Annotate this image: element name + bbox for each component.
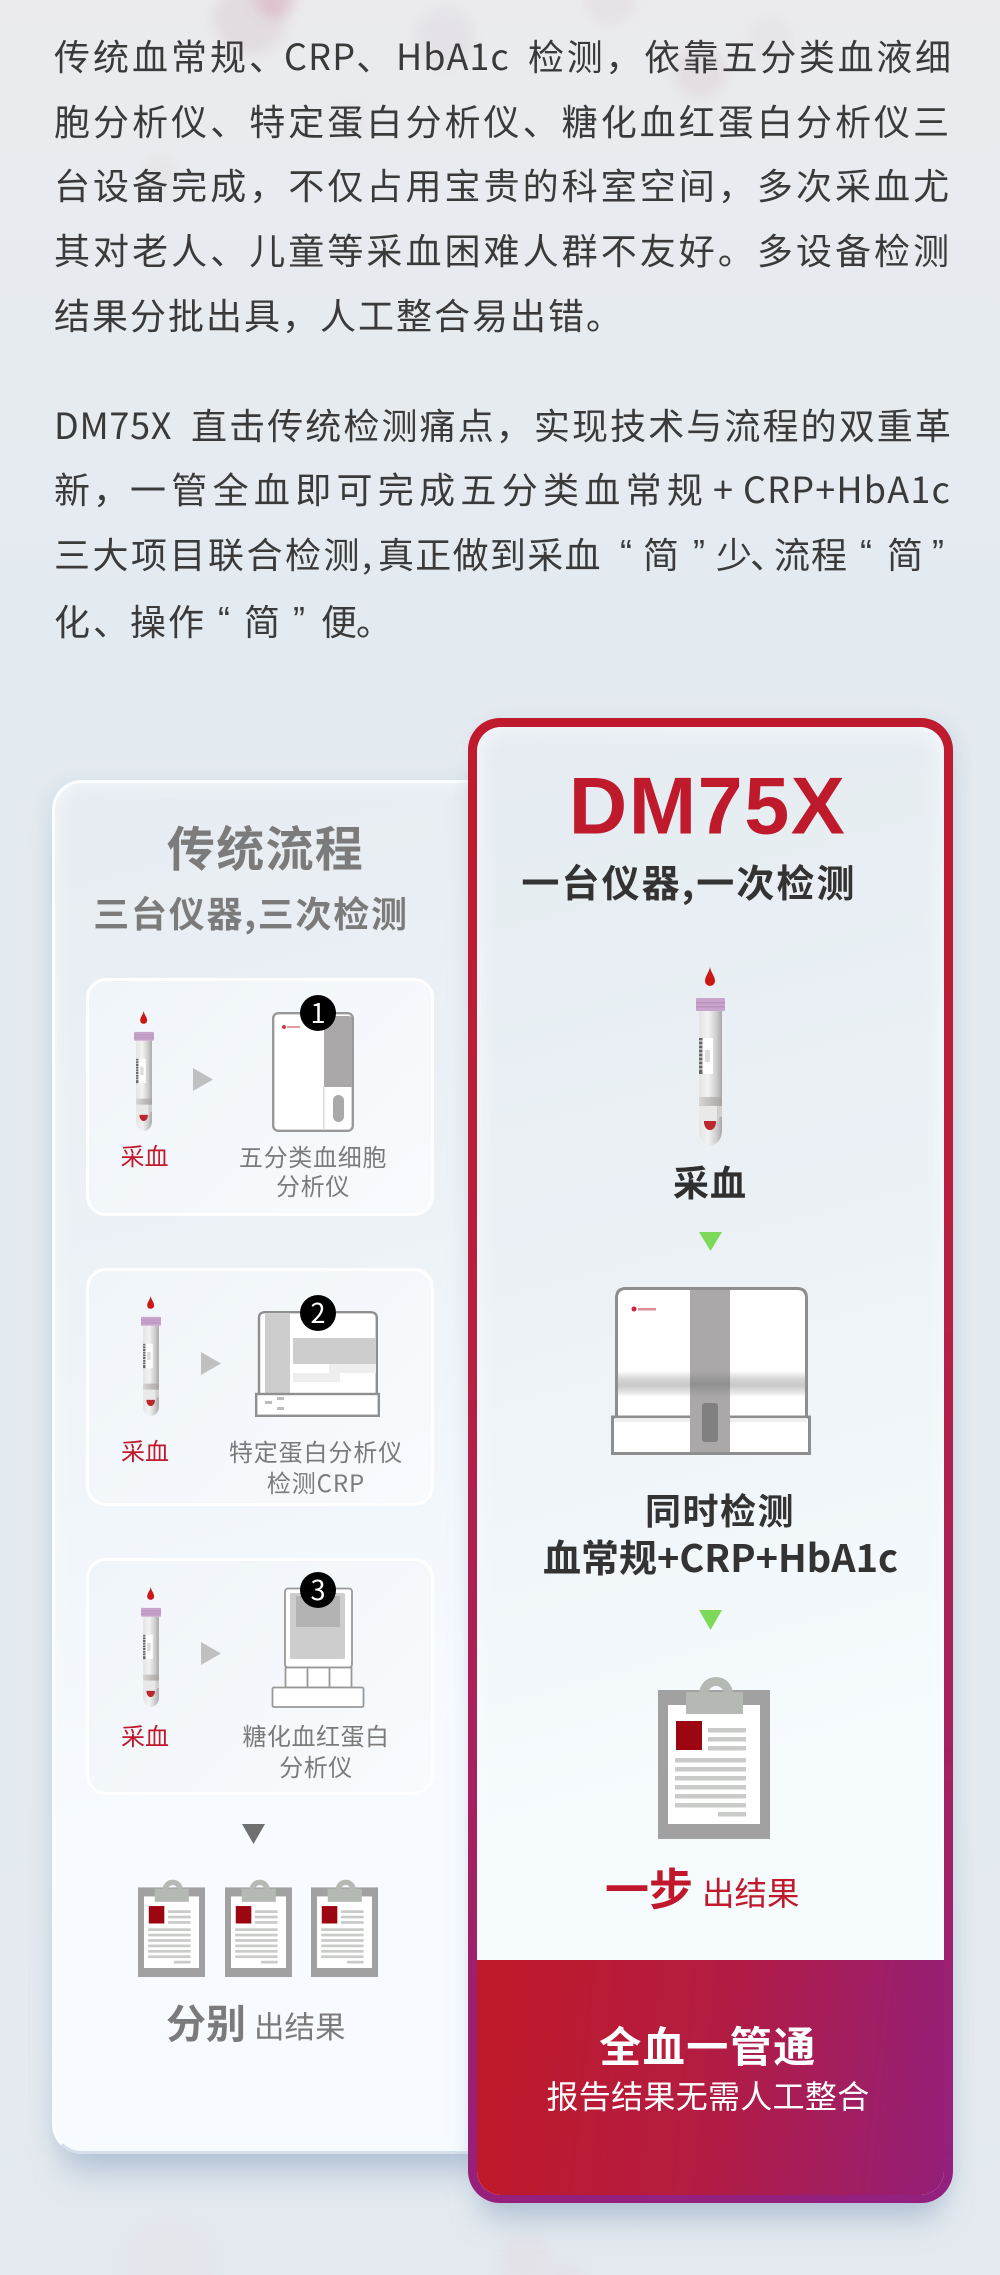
icon: blood tube 2 bbox=[141, 1296, 161, 1416]
label: five-part analyzer: 五分类血细胞 bbox=[239, 1138, 387, 1173]
subheading: three instruments three tests: 三台仪器,三次检测 bbox=[93, 886, 409, 938]
band text: no manual integration: 报告结果无需人工整合 bbox=[546, 2072, 870, 2118]
label: HbA1c analyzer bbox=[242, 1716, 390, 1782]
label: blood draw 1: 采血 bbox=[120, 1137, 168, 1172]
label: blood draw: 采血 bbox=[673, 1155, 747, 1207]
icon: blood tube large bbox=[696, 967, 725, 1145]
step card 2 bbox=[86, 1268, 434, 1506]
badge 1: 1 bbox=[310, 992, 326, 1031]
intro paragraph 2: ” bbox=[932, 532, 944, 573]
intro paragraph 1: HbA1c bbox=[396, 29, 510, 81]
badge 2 bbox=[300, 1295, 336, 1331]
arrow 3 bbox=[201, 1642, 221, 1665]
bottom band bbox=[477, 1960, 944, 2195]
step card 1 bbox=[86, 978, 434, 1216]
badge 3 bbox=[300, 1572, 336, 1608]
icon: specific protein analyzer bbox=[255, 1311, 380, 1417]
label: test items: 血常规+CRP+HbA1c bbox=[543, 1528, 898, 1583]
icon: HbA1c analyzer bbox=[272, 1588, 364, 1708]
label: specific protein analyzer: 特定蛋白分析仪 bbox=[229, 1433, 403, 1468]
intro paragraph 2: “ bbox=[620, 532, 632, 573]
intro paragraph 2: 简 bbox=[887, 527, 923, 579]
panel: traditional process bbox=[52, 780, 552, 2154]
label: blood draw 3: 采血 bbox=[121, 1717, 169, 1752]
intro paragraph 2: , bbox=[362, 527, 372, 579]
intro paragraph 2: 少、 bbox=[716, 527, 784, 579]
arrow 2 bbox=[201, 1352, 221, 1375]
intro paragraph 2: 流程 bbox=[774, 527, 848, 579]
intro paragraph 2: 直击传统检测痛点，实现技术与流程的双重革 bbox=[191, 398, 953, 450]
icon: DM75X analyzer bbox=[611, 1287, 811, 1455]
intro paragraph 2 bbox=[54, 398, 953, 646]
band text: whole blood one tube: 全血一管通 bbox=[599, 2014, 817, 2075]
icon: report 3 bbox=[311, 1880, 378, 1977]
panel: DM75X bbox=[468, 718, 953, 2203]
badge 2: 2 bbox=[310, 1292, 326, 1331]
intro paragraph 1: 其对老人、儿童等采血困难人群不友好。多设备检测 bbox=[54, 223, 952, 275]
intro paragraph 2: 简 bbox=[643, 527, 679, 579]
heading: traditional process: 传统流程 bbox=[167, 810, 364, 880]
intro paragraph 2: 操作 bbox=[130, 594, 206, 646]
intro paragraph 1: 传统血常规、 bbox=[54, 29, 288, 81]
intro paragraph 2: 便。 bbox=[321, 594, 391, 646]
arrow 1 bbox=[193, 1068, 213, 1091]
label: HbA1c analyzer: 分析仪 bbox=[279, 1748, 353, 1782]
intro paragraph 1: 检测，依靠五分类血液细 bbox=[528, 29, 954, 81]
icon: report large bbox=[658, 1677, 770, 1839]
label: simultaneous test: 同时检测 bbox=[645, 1483, 795, 1535]
intro paragraph 2: “ bbox=[860, 532, 872, 573]
intro paragraph 1: CRP、 bbox=[284, 29, 393, 81]
intro paragraph 2: + bbox=[713, 462, 733, 514]
label: blood draw 2: 采血 bbox=[121, 1432, 169, 1467]
intro paragraph 1: 结果分批出具，人工整合易出错。 bbox=[54, 288, 624, 340]
badge 1 bbox=[300, 995, 336, 1031]
intro paragraph 2: DM75X bbox=[54, 398, 172, 450]
badge 3: 3 bbox=[310, 1569, 326, 1608]
step card 3 bbox=[86, 1558, 434, 1795]
intro paragraph 2: 三大项目联合检测 bbox=[54, 527, 362, 579]
arrow down: traditional bbox=[242, 1824, 265, 1844]
icon: report 1 bbox=[138, 1880, 205, 1977]
intro paragraph 2: 简 bbox=[244, 594, 280, 646]
intro paragraph 2: ” bbox=[693, 532, 705, 573]
intro paragraph 2: ” bbox=[293, 599, 305, 640]
icon: report 2 bbox=[225, 1880, 292, 1977]
green arrow 2 bbox=[699, 1610, 722, 1630]
intro paragraph 1: 胞分析仪、特定蛋白分析仪、糖化血红蛋白分析仪三 bbox=[54, 94, 952, 146]
product title: DM75X bbox=[569, 762, 846, 852]
label: five-part analyzer: 分析仪 bbox=[276, 1167, 350, 1202]
intro paragraph 2: “ bbox=[218, 599, 230, 640]
label: specific protein analyzer: 检测CRP bbox=[267, 1464, 365, 1499]
intro paragraph 2: 真正做到采血 bbox=[378, 527, 602, 579]
intro paragraph 2: 新， bbox=[54, 462, 132, 514]
intro paragraph 1 bbox=[54, 29, 954, 340]
result text: one step: 一步 出结果 bbox=[605, 1854, 800, 1918]
intro paragraph 2: 一管全血即可完成五分类血常规 bbox=[130, 462, 708, 514]
intro paragraph 1: 台设备完成，不仅占用宝贵的科室空间，多次采血尤 bbox=[54, 158, 952, 210]
subheading: one instrument one test: 一台仪器,一次检测 bbox=[521, 853, 857, 908]
green arrow 1 bbox=[699, 1232, 722, 1251]
label: HbA1c analyzer: 糖化血红蛋白 bbox=[242, 1716, 390, 1752]
intro paragraph 2: CRP+HbA1c bbox=[743, 462, 951, 514]
intro paragraph 2: 化、 bbox=[54, 594, 132, 646]
icon: five-part analyzer bbox=[272, 1012, 354, 1132]
icon: blood tube 1 bbox=[134, 1011, 154, 1131]
icon: blood tube 3 bbox=[141, 1587, 161, 1707]
label: five-part analyzer bbox=[239, 1138, 387, 1202]
result text: separately: 分别 出结果 bbox=[166, 1992, 346, 2050]
label: specific protein analyzer bbox=[229, 1433, 403, 1499]
